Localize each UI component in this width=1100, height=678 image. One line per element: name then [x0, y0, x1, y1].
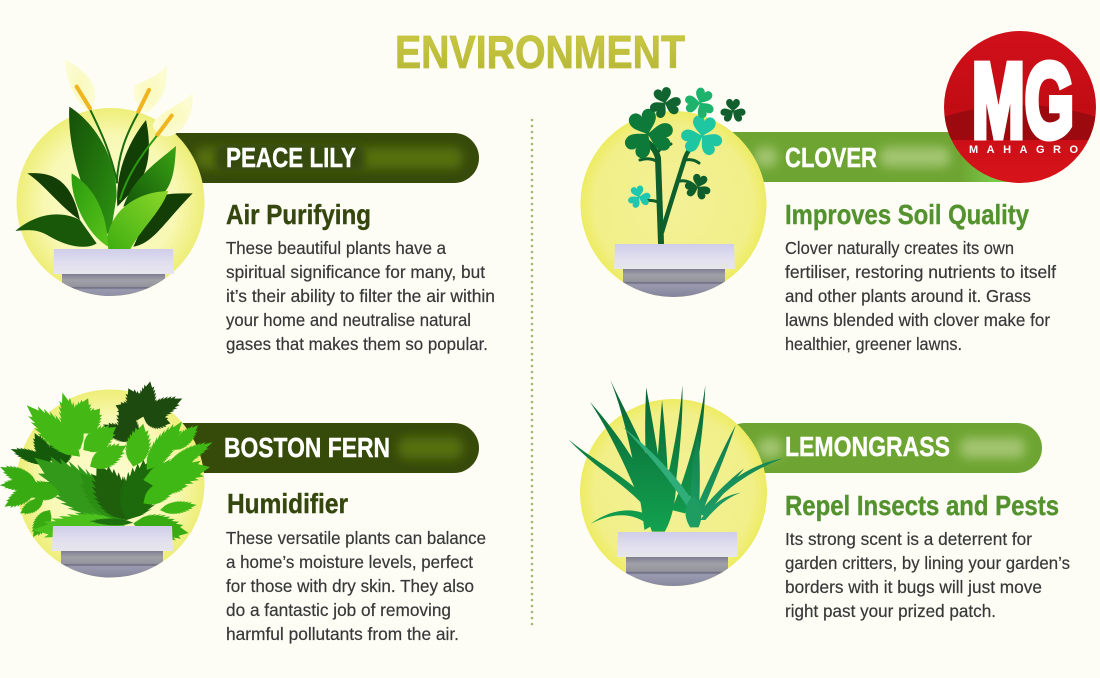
banner: peace lily: PEACE LILY: [226, 142, 356, 173]
subheading: repel insects and pests: Repel Insects and Pests: [785, 490, 1059, 521]
banner: boston fern: BOSTON FERN: [224, 432, 390, 463]
subheading: humidifier: Humidifier: [227, 488, 348, 519]
body text: lemongrass: [785, 529, 1070, 621]
body text: peace lily: it’s their ability to filter the air within: [226, 286, 495, 306]
panel: boston fern: [0, 379, 486, 644]
logo: MG Mahagro: MAHAGRO: [969, 144, 1078, 156]
icon: peace lily in pot: [15, 59, 204, 304]
body text: clover: [785, 238, 1056, 354]
body text: boston fern: These versatile plants can balance: [226, 528, 486, 548]
body text: clover: Clover naturally creates its own: [785, 238, 1014, 258]
body text: boston fern: do a fantastic job of removing: [226, 600, 451, 620]
body text: peace lily: spiritual significance for many, but: [226, 262, 485, 282]
panel: lemongrass: [568, 379, 1070, 621]
banner: boston fern: [150, 423, 479, 473]
body text: boston fern: for those with dry skin. They also: [226, 576, 474, 596]
icon: clover in pot: [580, 83, 766, 299]
body text: boston fern: harmful pollutants from the air.: [226, 624, 459, 644]
icon: lemongrass in pot: [568, 379, 783, 591]
body text: peace lily: These beautiful plants have a: [226, 238, 446, 258]
body text: lemongrass: Its strong scent is a deterrent for: [785, 529, 1032, 549]
body text: peace lily: [226, 238, 495, 354]
body text: boston fern: [226, 528, 486, 644]
banner: lemongrass: [720, 423, 1042, 473]
body text: peace lily: your home and neutralise natural: [226, 310, 471, 330]
body text: clover: and other plants around it. Grass: [785, 286, 1031, 306]
body text: clover: fertiliser, restoring nutrients to itself: [785, 262, 1056, 282]
panel: clover: [580, 83, 1056, 354]
body text: clover: lawns blended with clover make for: [785, 310, 1050, 330]
body text: lemongrass: borders with it bugs will just move: [785, 577, 1042, 597]
banner: lemongrass: LEMONGRASS: [785, 431, 950, 462]
panel: peace lily: [15, 59, 495, 354]
body text: clover: healthier, greener lawns.: [785, 334, 962, 354]
logo: MG Mahagro: [940, 31, 1100, 183]
body text: lemongrass: right past your prized patch.: [785, 601, 996, 621]
banner: clover: CLOVER: [785, 142, 877, 173]
subheading: air purifying: Air Purifying: [226, 199, 371, 230]
body text: boston fern: a home’s moisture levels, perfect: [226, 552, 473, 572]
banner: peace lily: [150, 133, 479, 183]
subheading: improves soil quality: Improves Soil Quality: [785, 199, 1029, 230]
title: ENVIRONMENT: [395, 26, 685, 78]
banner: clover: [720, 132, 1020, 182]
icon: boston fern in pot: [0, 379, 216, 581]
body text: lemongrass: garden critters, by lining your garden’s: [785, 553, 1070, 573]
body text: peace lily: gases that makes them so popular.: [226, 334, 488, 354]
